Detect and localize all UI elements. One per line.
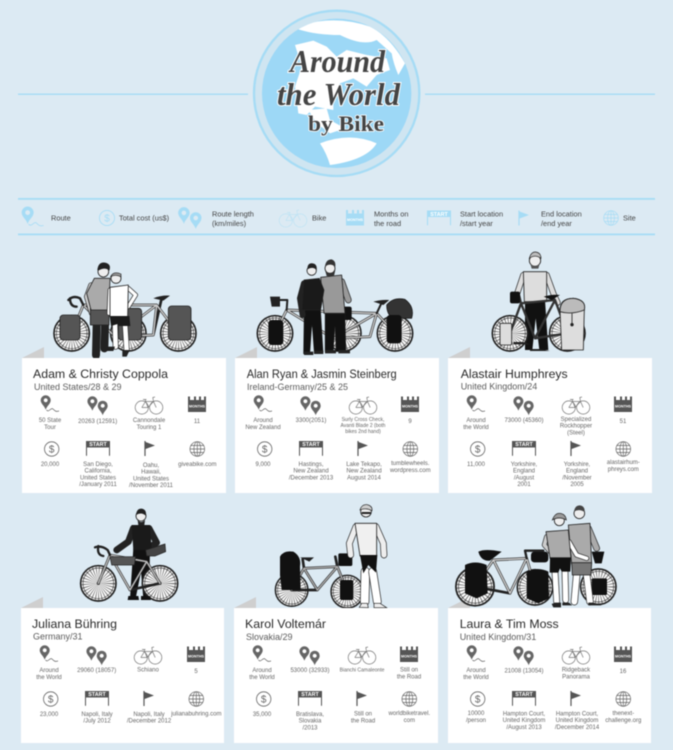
legend: route: Route xyxy=(51,214,71,222)
stat: start: California, xyxy=(84,469,112,475)
legend: end: /end year xyxy=(541,219,572,228)
header rule left xyxy=(18,94,248,95)
stat: bike: bikes 2nd hand) xyxy=(345,429,381,435)
stat: route: the World xyxy=(249,675,275,681)
panel: Alastair Humphreys xyxy=(448,358,652,493)
stat: route: the World xyxy=(36,675,62,681)
stat: cost: 10000 xyxy=(468,711,485,717)
stat: bike xyxy=(562,647,591,680)
legend: site xyxy=(604,211,636,225)
title text: the World xyxy=(277,76,401,112)
stat: bike: Panorama xyxy=(562,674,591,680)
stat: end xyxy=(127,691,172,725)
country and age: Ireland-Germany/25 & 25 xyxy=(247,382,348,392)
panel: Laura & Tim Moss xyxy=(448,608,651,743)
stat: route xyxy=(36,645,62,681)
stat: cost: 23,000 xyxy=(40,712,59,718)
legend: bike xyxy=(279,210,326,227)
stat: end: Oahu, xyxy=(143,463,159,469)
stat: route xyxy=(245,395,281,431)
stat: cost xyxy=(253,692,272,718)
stat: route length xyxy=(504,396,544,424)
stat: site: phreys.com xyxy=(608,467,639,473)
stat: start: United States xyxy=(80,475,116,481)
stat: start: England xyxy=(513,469,535,475)
stat: end xyxy=(351,691,375,724)
stat: cost xyxy=(255,442,272,468)
illustration: Alan and Jasmin with tandem bikes xyxy=(257,259,413,355)
stat: months xyxy=(187,646,205,675)
stat: route: Around xyxy=(39,668,59,674)
stat: start: START xyxy=(515,692,533,698)
legend: total cost: Total cost (us$) xyxy=(119,214,169,222)
stat: months xyxy=(614,646,632,675)
stat: start xyxy=(296,691,324,731)
name: Adam & Christy Coppola xyxy=(33,367,168,381)
stat: route length xyxy=(77,646,116,674)
stat: site xyxy=(387,692,430,724)
stat: start xyxy=(511,441,538,488)
stat: cost xyxy=(466,692,486,724)
stat: start: Slovakia xyxy=(299,719,322,725)
stat: months: MONTHS xyxy=(615,654,632,658)
panel: Alan Ryan & Jasmin Steinberg xyxy=(235,358,439,493)
fold tabs xyxy=(21,347,470,608)
stat: end: New Zealand xyxy=(346,469,382,475)
stat: cost: $ xyxy=(49,444,55,456)
stat: months: MONTHS xyxy=(615,404,632,408)
legend: route xyxy=(22,207,71,226)
stat: bike xyxy=(133,397,166,431)
stat: cost: 20,000 xyxy=(41,462,60,468)
stat: route length: 29060 (18057) xyxy=(77,668,116,674)
stat: start: /July 2012 xyxy=(83,719,111,725)
stat: site: thenext- xyxy=(612,711,634,717)
legend: site: Site xyxy=(623,214,636,222)
stat: bike: Cannondale xyxy=(133,418,166,424)
stat: route: Tour xyxy=(44,425,56,431)
stat: months: MONTHS xyxy=(401,654,418,658)
stat: cost: $ xyxy=(475,444,481,456)
stat: cost: $ xyxy=(262,444,268,456)
stat: cost: 9,000 xyxy=(255,462,271,468)
stat: months: the Road xyxy=(397,674,421,680)
stat: bike xyxy=(560,397,592,436)
country and age: United Kingdom/24 xyxy=(461,382,537,392)
stat: start: San Diego, xyxy=(83,462,113,468)
stat: route: Around xyxy=(466,418,486,424)
stat: site: alastairhum- xyxy=(607,460,640,466)
stat: bike xyxy=(341,397,386,435)
country and age: United States/28 & 29 xyxy=(34,382,122,392)
illustration: Laura and Tim with bikes xyxy=(456,505,616,607)
stat: bike xyxy=(340,647,385,674)
stat: route length xyxy=(504,646,544,674)
stat: months: MONTHS xyxy=(188,654,205,658)
stat: bike: Schiano xyxy=(137,668,160,674)
stat: end: Yorkshire, xyxy=(564,462,591,468)
stat: route length xyxy=(296,396,326,424)
stat: end: United Kingdom xyxy=(556,718,598,724)
stat: site: wordpress.com xyxy=(389,468,431,474)
stat: site xyxy=(605,692,641,724)
stat: cost: $ xyxy=(48,694,54,706)
stat: route xyxy=(463,645,489,681)
stat: cost: 11,000 xyxy=(467,462,486,468)
stat: months xyxy=(401,396,419,425)
stat: start: /2013 xyxy=(302,725,318,731)
title text: Around xyxy=(288,43,386,79)
stat: route: 50 State xyxy=(39,418,62,424)
legend: start xyxy=(427,210,503,228)
stat: start: 2001 xyxy=(517,482,531,488)
stat: site: com xyxy=(404,718,415,724)
stat: months: MONTHS xyxy=(189,404,206,408)
stat: site: challenge.org xyxy=(605,718,641,724)
name: Juliana Bühring xyxy=(32,617,117,631)
stat: months: Still on xyxy=(400,668,418,674)
stat: months xyxy=(614,396,632,425)
title text: by Bike xyxy=(308,111,384,136)
stat: months: 16 xyxy=(620,669,627,675)
stat: start xyxy=(289,441,334,481)
stat: months: 51 xyxy=(620,419,627,425)
stat: route length: 21008 (13054) xyxy=(504,668,544,674)
legend: route length: Route length xyxy=(212,210,254,218)
globe xyxy=(254,11,419,176)
stat: end: Hawaii, xyxy=(141,470,161,476)
stat: bike: Bianchi Camaleonte xyxy=(340,668,385,674)
country and age: Germany/31 xyxy=(33,632,83,642)
stat: route: the World xyxy=(463,425,489,431)
stat: start: Hampton Court, xyxy=(503,712,546,718)
stat: end: United States xyxy=(133,476,169,482)
stat: start: /December 2013 xyxy=(289,475,334,481)
legend: start: /start year xyxy=(460,219,493,228)
legend: route length: (km/miles) xyxy=(212,219,246,228)
name: Alan Ryan & Jasmin Steinberg xyxy=(247,367,397,381)
stat: start: Yorkshire, xyxy=(511,462,538,468)
name: Laura & Tim Moss xyxy=(460,617,559,631)
stat: end: /December 2012 xyxy=(127,719,172,725)
stat: route: Around xyxy=(466,668,486,674)
stat: start: Hastings, xyxy=(298,462,324,468)
stat: route: Around xyxy=(253,418,273,424)
stat: end xyxy=(346,441,382,481)
stat: months: 5 xyxy=(194,669,198,675)
stat: end: /November xyxy=(562,475,592,481)
stat: start: United Kingdom xyxy=(503,718,545,724)
illustration: Alastair with bike xyxy=(492,252,585,351)
stat: route length: 3300(2051) xyxy=(296,418,326,424)
legend: route length xyxy=(178,207,254,229)
stat: cost xyxy=(40,692,59,718)
stat: route: Around xyxy=(252,668,272,674)
stat: route: the World xyxy=(463,675,489,681)
stat: bike: Avanti Blade 2 (both xyxy=(341,423,386,429)
stat: end: Napoli, Italy xyxy=(133,712,165,718)
stat: months: 11 xyxy=(194,419,201,425)
stat: route xyxy=(463,395,489,431)
stat: start xyxy=(503,691,546,731)
panel: Karol Voltemár xyxy=(234,608,438,743)
illustration: Juliana with bike xyxy=(81,509,178,601)
stat: end xyxy=(555,691,600,731)
stat: cost xyxy=(41,442,60,468)
stat: end xyxy=(129,441,174,489)
title text xyxy=(277,43,401,136)
stat: start: /August 2013 xyxy=(506,725,542,731)
panel: Adam & Christy Coppola xyxy=(22,358,226,493)
stat: cost: 35,000 xyxy=(253,712,272,718)
country and age: Slovakia/29 xyxy=(246,632,293,642)
stat: site: giveabike.com xyxy=(178,462,216,468)
stat: end: 2005 xyxy=(570,482,584,488)
legend: bike: Bike xyxy=(312,214,326,222)
stat: route: New Zealand xyxy=(245,425,281,431)
legend: months: the road xyxy=(374,219,401,228)
title badge: globe and title xyxy=(254,11,419,176)
stat: site: worldbiketravel. xyxy=(387,711,430,717)
stat: start xyxy=(79,441,117,488)
legend: end: End location xyxy=(541,210,582,218)
stat: start: START xyxy=(515,442,533,448)
country and age: United Kingdom/31 xyxy=(460,632,536,642)
stat: end: /November 2011 xyxy=(129,483,174,489)
name: Karol Voltemár xyxy=(245,617,326,631)
stat: bike: Touring 1 xyxy=(137,425,162,431)
stat: end: the Road xyxy=(351,718,375,724)
stat: end: Hampton Court, xyxy=(556,712,599,718)
stat: site xyxy=(178,442,216,468)
legend: total cost xyxy=(99,210,169,226)
stat: bike: Specialized xyxy=(561,417,591,423)
stat: cost xyxy=(467,442,486,468)
stat: end xyxy=(562,441,592,488)
stat: cost: /person xyxy=(466,718,486,724)
stat: months: MONTHS xyxy=(402,404,419,408)
stat: start: New Zealand xyxy=(293,469,329,475)
stat: site xyxy=(607,442,640,473)
stat: site xyxy=(170,692,221,718)
stat: site: julianabuhring.com xyxy=(170,712,221,718)
legend: start: Start location xyxy=(460,210,503,218)
stat: months xyxy=(397,646,421,680)
stat: site: tumblewheels. xyxy=(391,461,430,467)
stat: end: Lake Tekapo, xyxy=(346,462,382,468)
stat: route length xyxy=(78,396,117,425)
stat: bike: Rockhopper xyxy=(560,424,592,430)
stat: months: 9 xyxy=(408,419,412,425)
stat: end: Still on xyxy=(354,712,372,718)
legend: start: START xyxy=(430,212,448,218)
stat: start xyxy=(81,691,113,725)
stat: bike: Surly Cross Check, xyxy=(342,417,384,423)
legend bar xyxy=(18,198,655,235)
stat: start: /January 2011 xyxy=(79,482,117,488)
stat: bike xyxy=(134,647,162,674)
stat: end: England xyxy=(566,469,588,475)
stat: route xyxy=(249,645,275,681)
stat: start: /August xyxy=(514,475,534,481)
stat: cost: $ xyxy=(261,694,267,706)
stat: months xyxy=(188,396,206,425)
stat: route xyxy=(39,395,62,431)
stat: bike: Ridgeback xyxy=(562,668,591,674)
stat: end: August 2014 xyxy=(347,475,382,481)
stat: start: START xyxy=(88,692,106,698)
stat: route length: 73000 (45360) xyxy=(504,418,544,424)
name: Alastair Humphreys xyxy=(461,367,568,381)
stat: start: START xyxy=(302,442,320,448)
stat: end: /December 2014 xyxy=(555,725,600,731)
stat: start: START xyxy=(301,692,319,698)
stat: bike: (Steel) xyxy=(567,430,585,436)
legend: months: Months on xyxy=(374,210,409,218)
legend: months xyxy=(346,210,409,228)
illustration: Adam and Christy with bikes xyxy=(54,263,196,360)
stat: start: Napoli, Italy xyxy=(81,712,113,718)
panel: Juliana Bühring xyxy=(21,608,224,743)
stat: route length xyxy=(290,646,330,674)
legend: end xyxy=(518,210,582,228)
stat: route length: 53000 (32933) xyxy=(290,668,330,674)
stat: site xyxy=(389,442,431,474)
header rule right xyxy=(425,94,655,95)
stat: start: START xyxy=(89,442,107,448)
illustration: Karol with bike xyxy=(275,505,387,608)
stat: cost: $ xyxy=(475,694,481,706)
stat: route length: 20263 (12591) xyxy=(78,419,117,425)
legend: total cost: $ xyxy=(104,214,110,224)
legend: months: MONTHS xyxy=(347,218,364,222)
stat: start: Bratislava, xyxy=(296,712,324,718)
